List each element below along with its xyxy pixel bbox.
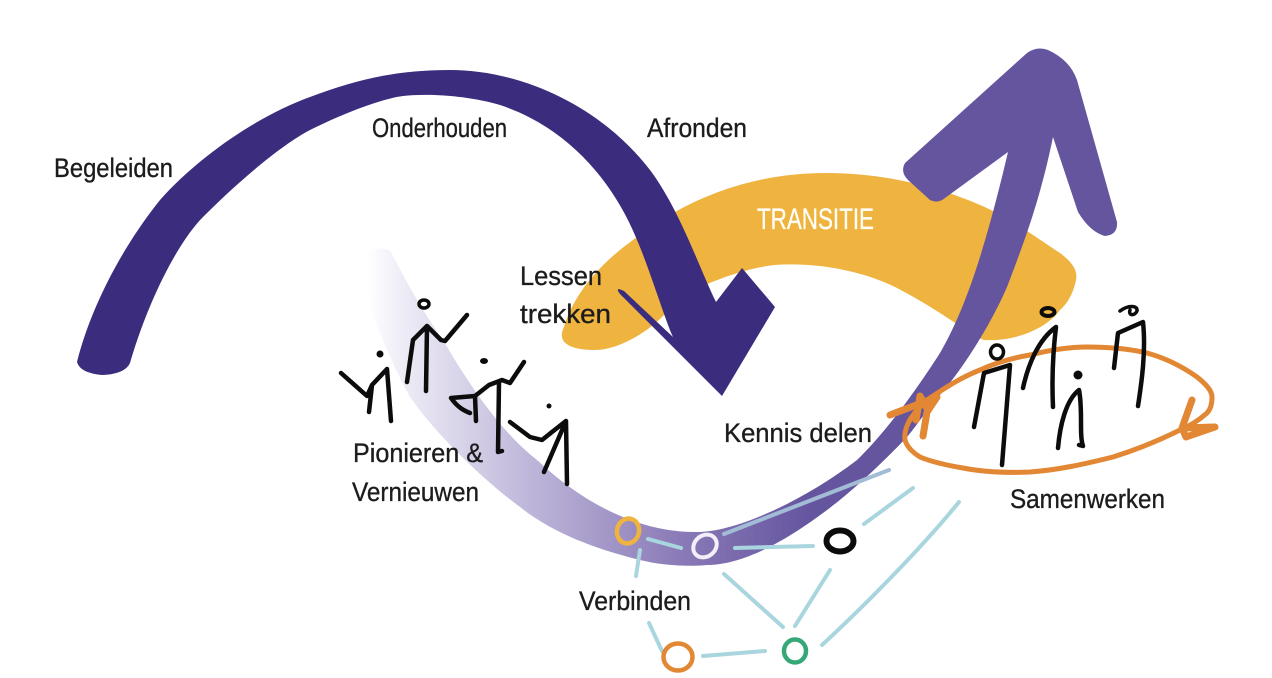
label: Kennis delen: Kennis delen bbox=[724, 418, 872, 448]
label: Pionieren en Vernieuwen: Pionieren & bbox=[353, 438, 483, 468]
curve: new rising arrow bbox=[367, 49, 1117, 566]
band: orange transition bbox=[562, 173, 1076, 350]
node: green bbox=[784, 640, 806, 662]
label: Lessen trekken bbox=[520, 261, 611, 329]
label: Afronden: Afronden bbox=[647, 113, 747, 143]
label: Lessen trekken: trekken bbox=[520, 299, 611, 329]
figures: pioneers bbox=[341, 300, 567, 484]
label: Samenwerken: Samenwerken bbox=[1010, 484, 1165, 514]
label: Onderhouden: Onderhouden bbox=[372, 113, 507, 143]
figures: collaborators bbox=[974, 306, 1144, 465]
node: yellow bbox=[614, 516, 642, 546]
label: Verbinden: Verbinden bbox=[579, 586, 691, 616]
curve: dark declining arrow bbox=[77, 70, 775, 396]
node: orange bbox=[664, 644, 692, 670]
label: Pionieren en Vernieuwen bbox=[352, 438, 483, 507]
heading: Transitie: TRANSITIE bbox=[757, 203, 874, 236]
ring: collaboration cycle bbox=[890, 347, 1215, 472]
node: black bbox=[826, 530, 854, 552]
network: connecting lines bbox=[636, 470, 959, 656]
label: Begeleiden: Begeleiden bbox=[54, 153, 173, 183]
node: white bbox=[689, 530, 721, 562]
label: Pionieren en Vernieuwen: Vernieuwen bbox=[352, 477, 479, 507]
label: Lessen trekken: Lessen bbox=[520, 261, 602, 291]
